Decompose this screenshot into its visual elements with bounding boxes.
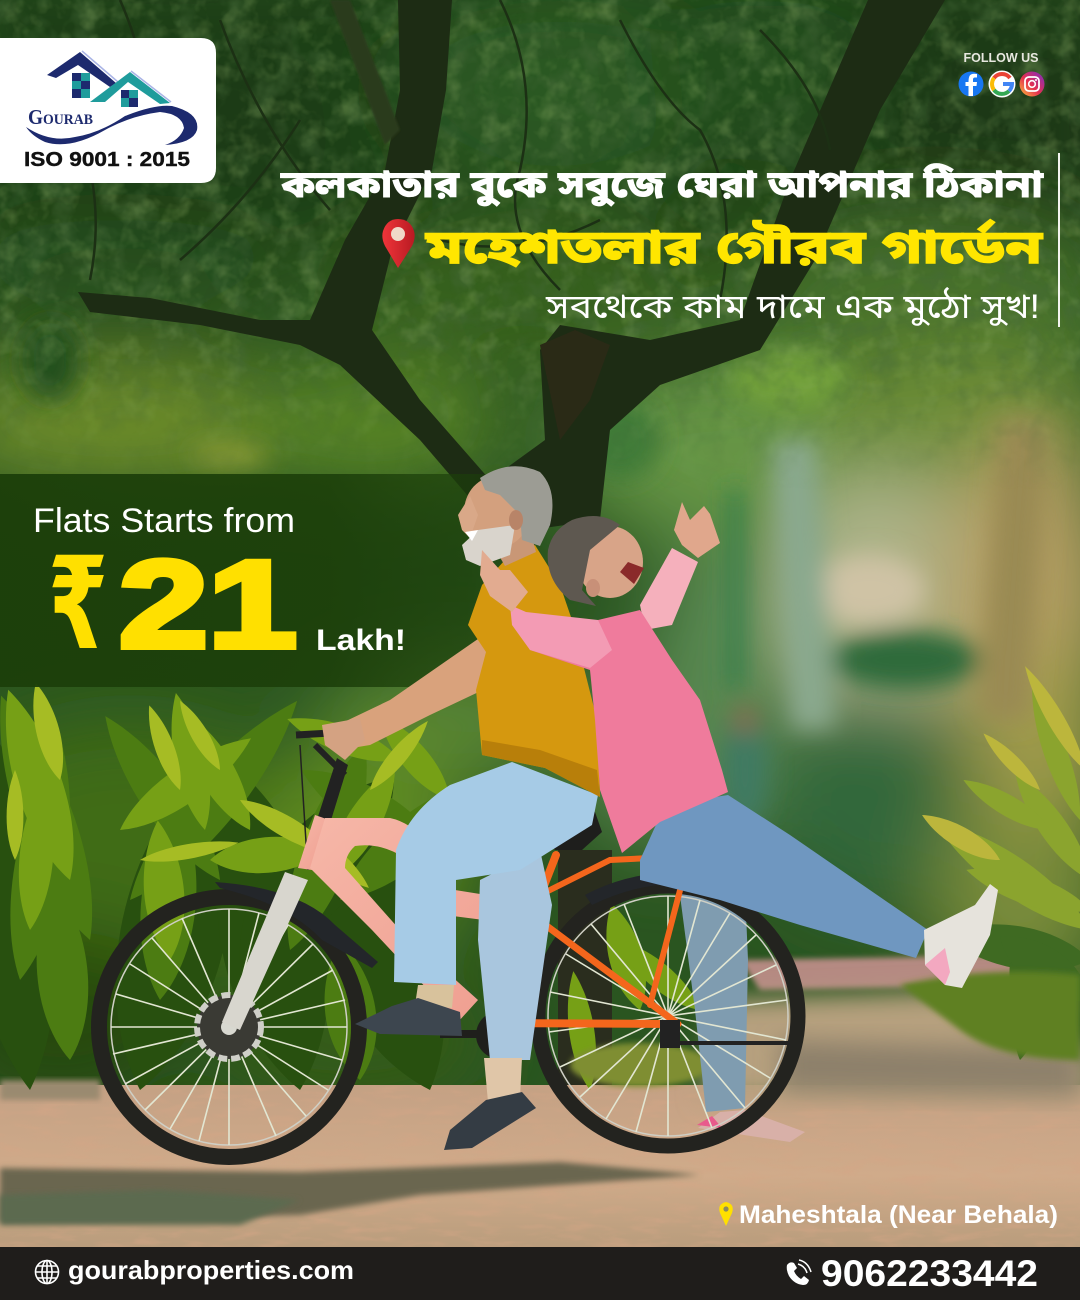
man: forearm xyxy=(344,632,504,748)
hanging twigs xyxy=(60,0,830,300)
icon: facebook xyxy=(958,72,984,96)
photo: left foliage leaves xyxy=(0,680,500,1108)
icon: globe xyxy=(36,1260,58,1284)
woman: shoe xyxy=(924,884,998,988)
man: far leg xyxy=(478,850,552,1060)
price figure: 21 xyxy=(119,536,297,674)
man: shoe xyxy=(355,998,462,1036)
woman: far hand xyxy=(674,502,720,558)
location text: Maheshtala (Near Behala) xyxy=(739,1201,1058,1229)
man: far shoe xyxy=(444,1092,536,1150)
woman's far leg xyxy=(678,880,805,1142)
photo: foliage inside rear wheel xyxy=(558,850,710,1092)
fork xyxy=(222,872,308,1030)
blurred light patches xyxy=(22,320,1050,830)
orange frame tubes xyxy=(488,855,684,1030)
woman: head xyxy=(548,516,644,606)
logo: navy house window xyxy=(72,73,90,98)
photo: ground path xyxy=(0,955,1080,1250)
handlebar and stem xyxy=(296,732,348,870)
vertical divider xyxy=(1058,153,1060,327)
photo: right foliage leaves xyxy=(900,662,1080,1062)
footer bar xyxy=(0,1247,1080,1300)
logo: ISO text: ISO 9001 : 2015 xyxy=(24,149,190,171)
logo: wordmark: Gourab xyxy=(28,105,93,129)
logo: teal house window xyxy=(121,90,138,107)
headline line 2: project name: মহেশতলার গৌরব গার্ডেন xyxy=(425,219,1043,273)
icon: instagram xyxy=(1020,72,1044,96)
head tube xyxy=(298,815,335,870)
icon: phone xyxy=(787,1260,811,1285)
follow us label: FOLLOW US xyxy=(964,51,1038,65)
woman: raised far arm xyxy=(640,548,698,630)
phone number: 9062233442 xyxy=(821,1253,1038,1294)
woman: near hand xyxy=(480,550,528,612)
man: hand xyxy=(322,718,365,760)
photo: tree trunk and branches xyxy=(60,0,945,530)
headline block xyxy=(280,153,1060,327)
woman: blouse xyxy=(510,605,728,853)
icon: google xyxy=(988,70,1016,98)
woman xyxy=(480,502,998,988)
logo card xyxy=(0,38,216,183)
headline line 3: সবথেকে কাম দামে এক মুঠো সুখ! xyxy=(545,286,1040,326)
headline line 1: কলকাতার বুকে সবুজে ঘেরা আপনার ঠিকানা xyxy=(280,164,1044,207)
website: gourabproperties.com xyxy=(68,1255,354,1285)
man: polo shirt xyxy=(468,545,600,797)
man: neck and head xyxy=(458,466,552,566)
woman: near leg jeans xyxy=(640,795,928,958)
saddle xyxy=(545,812,602,850)
crank and kickstand xyxy=(440,1011,790,1059)
man: sock xyxy=(415,985,454,1008)
front fender xyxy=(215,882,378,968)
man: near leg jeans xyxy=(394,762,598,985)
price unit: Lakh! xyxy=(316,624,406,657)
rear fender xyxy=(585,873,730,905)
price band xyxy=(0,474,550,687)
rear wheel xyxy=(538,886,798,1146)
price label: Flats Starts from xyxy=(33,502,295,540)
man: far sock xyxy=(484,1058,522,1102)
logo: navy roof xyxy=(47,51,118,87)
foliage mottling xyxy=(0,0,1080,460)
man xyxy=(322,466,600,1150)
bicycle xyxy=(99,732,798,1157)
icon: yellow pin xyxy=(719,1202,733,1226)
front wheel xyxy=(99,897,359,1157)
pink frame xyxy=(310,818,530,1022)
rupee symbol: ₹ xyxy=(48,530,108,679)
social block xyxy=(958,51,1044,98)
icon: red map pin xyxy=(382,219,415,268)
location tag xyxy=(719,1201,1058,1229)
logo: teal roof xyxy=(90,71,171,104)
logo: swoosh xyxy=(26,106,197,145)
